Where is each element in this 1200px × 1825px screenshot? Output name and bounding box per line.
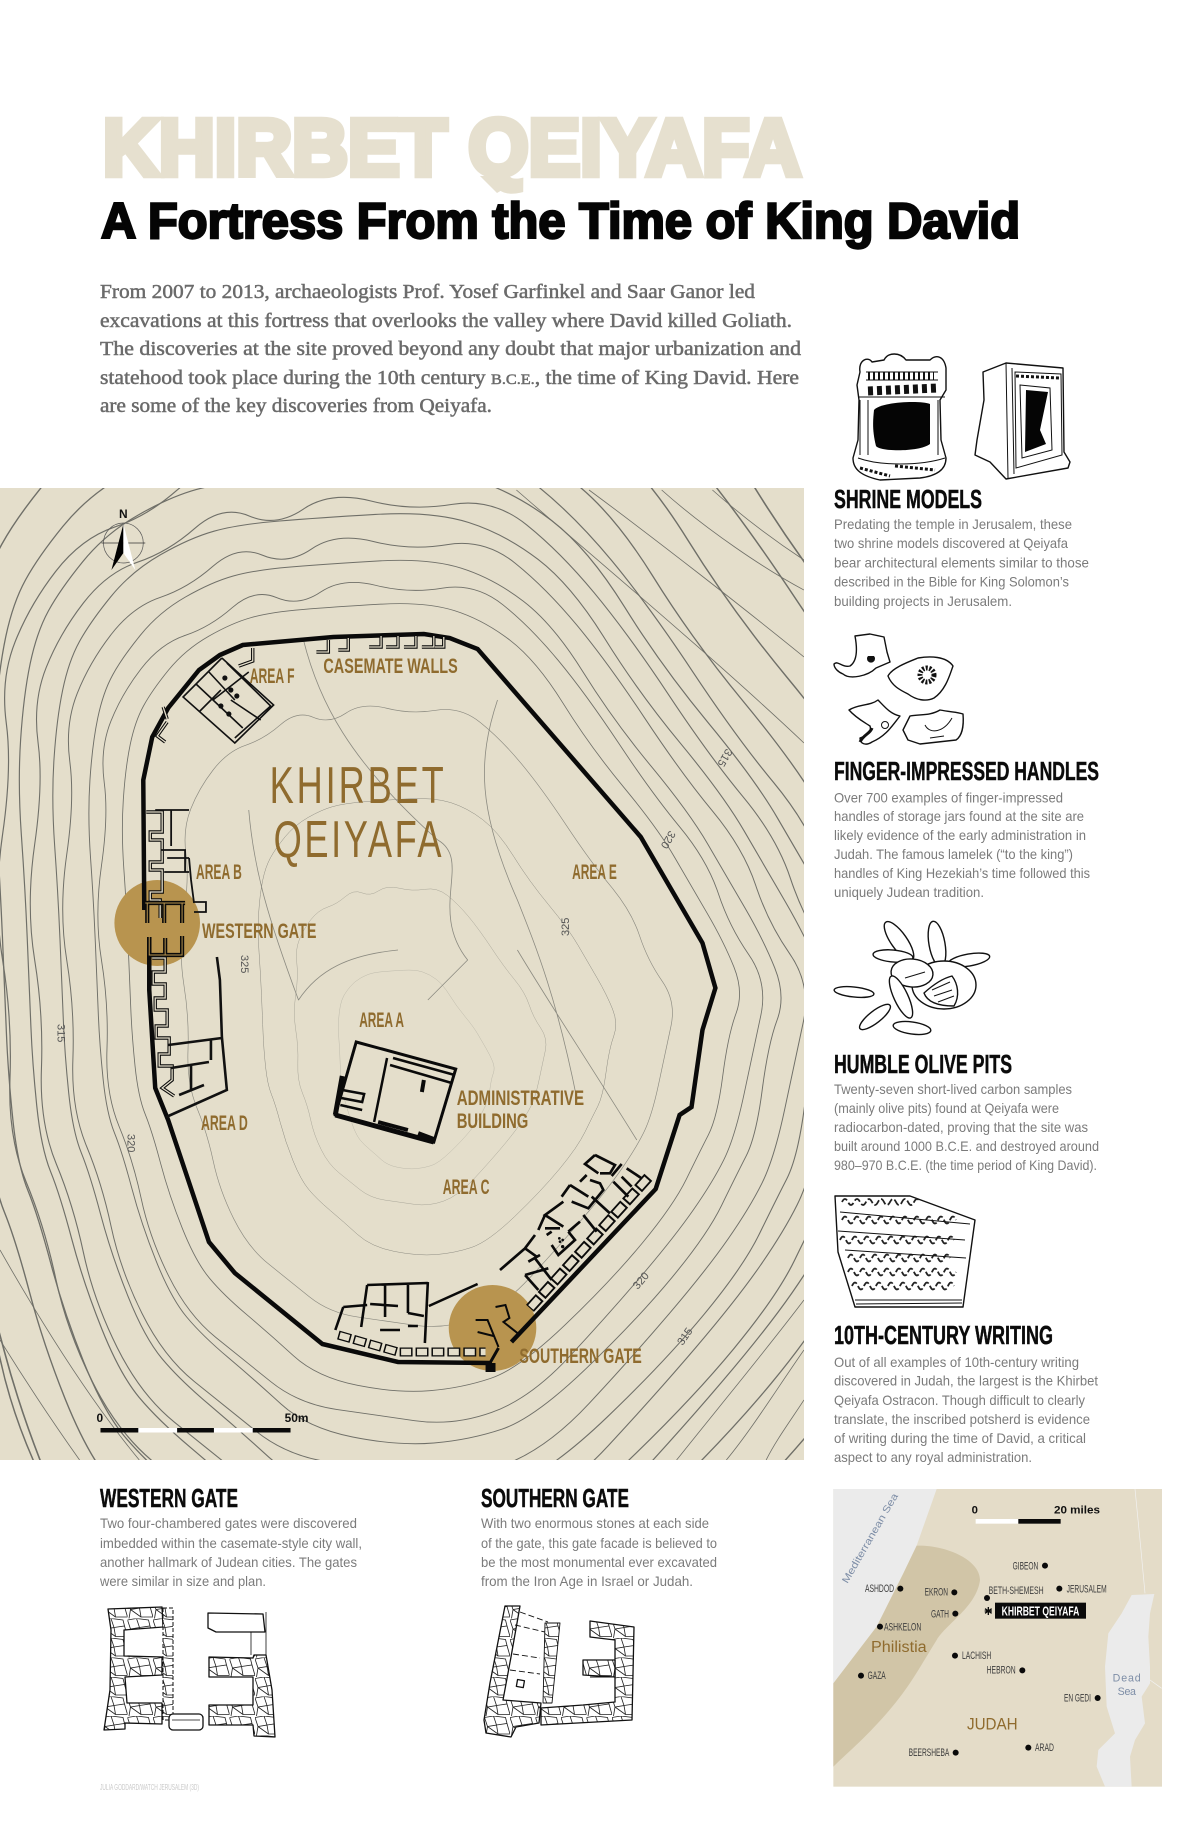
southern gate plan <box>476 1305 517 1347</box>
site name on map: QEIYAFA <box>274 811 442 869</box>
credit: JULIA GODDARD/WATCH JERUSALEM (3D) <box>100 1783 199 1792</box>
city names: ASHKELON <box>884 1622 921 1634</box>
text: finger-impressed handles: Judah. The famous lamelek (“to the king”) <box>834 846 1073 862</box>
heading: shrine models: SHRINE MODELS <box>834 484 982 514</box>
city names: GAZA <box>868 1670 886 1682</box>
city names: GATH <box>931 1608 949 1620</box>
intro text block: The discoveries at the site proved beyond any doubt that major urbanization and <box>100 338 801 360</box>
text: 10th-century writing: aspect to any royal administration. <box>834 1449 1032 1465</box>
Dead Sea label: Dead <box>1113 1672 1141 1684</box>
elevation labels: 315 <box>55 1024 67 1042</box>
map labels: AREA C <box>443 1176 490 1199</box>
elevation labels: 320 <box>124 1134 136 1152</box>
text: southern gate: With two enormous stones at each side <box>481 1515 709 1531</box>
south-east residential quarter <box>500 1155 648 1308</box>
heading: southern gate: SOUTHERN GATE <box>481 1483 629 1513</box>
text: shrine models: Predating the temple in Jerusalem, these <box>834 516 1072 532</box>
intro text block: excavations at this fortress that overlooks the valley where David killed Goliath. <box>100 310 792 332</box>
subtitle: A Fortress From the Time of King David <box>101 193 1020 249</box>
text: finger-impressed handles: Over 700 examples of finger-impressed <box>834 790 1063 806</box>
text: finger-impressed handles: handles of storage jars found at the site are <box>834 808 1084 824</box>
intro text block <box>100 281 801 417</box>
text: humble olive pits: built around 1000 B.C.E. and destroyed around <box>834 1138 1099 1154</box>
map scale bar <box>97 1411 308 1432</box>
sea <box>833 1489 937 1683</box>
text: humble olive pits <box>834 1081 1099 1173</box>
text: humble olive pits: (mainly olive pits) found at Qeiyafa were <box>834 1100 1059 1116</box>
administrative building <box>335 1042 456 1142</box>
text: 10th-century writing: Qeiyafa Ostracon. Though difficult to clearly <box>834 1392 1085 1408</box>
text: western gate: were similar in size and plan. <box>99 1573 266 1589</box>
site name on map: KHIRBET <box>270 757 444 815</box>
elevation labels <box>55 746 734 1348</box>
icon: inscribed ostracon <box>835 1196 975 1307</box>
text: western gate <box>99 1515 362 1589</box>
text: 10th-century writing: translate, the inscribed potsherd is evidence <box>834 1411 1090 1427</box>
building: area D rooms <box>166 957 227 1117</box>
scale bar: 0 <box>972 1504 978 1516</box>
text: 10th-century writing <box>834 1354 1098 1465</box>
intro text block: From 2007 to 2013, archaeologists Prof. Yosef Garfinkel and Saar Ganor led <box>100 281 755 303</box>
map scale bar: 50m <box>285 1411 308 1425</box>
map labels: SOUTHERN GATE <box>519 1345 642 1368</box>
southern rooms <box>335 1282 478 1343</box>
region: Philistia <box>833 1546 980 1767</box>
gate highlight: western <box>114 880 200 966</box>
site marker and label: KHIRBET QEIYAFA <box>1002 1605 1079 1619</box>
scale bar <box>972 1504 1100 1524</box>
Dead Sea label <box>1113 1672 1141 1698</box>
map labels: AREA D <box>201 1112 248 1135</box>
text: shrine models: described in the Bible for King Solomon’s <box>834 574 1069 590</box>
text: humble olive pits: radiocarbon-dated, proving that the site was <box>834 1119 1088 1135</box>
building: area B rooms <box>155 810 206 912</box>
intro text block: statehood took place during the 10th century B.C.E., the time of King David. Here <box>100 367 799 389</box>
region names <box>871 1639 1018 1733</box>
map labels: AREA E <box>572 861 617 884</box>
text: southern gate <box>481 1515 717 1589</box>
map labels: CASEMATE WALLS <box>323 655 458 678</box>
text: finger-impressed handles: handles of King Hezekiah’s time followed this <box>834 865 1090 881</box>
text: western gate: another hallmark of Judean cities. The gates <box>100 1554 357 1570</box>
city names: EKRON <box>925 1587 948 1599</box>
map labels: AREA A <box>359 1009 404 1032</box>
map scale bar: 0 <box>97 1411 103 1425</box>
Dead Sea <box>1097 1594 1154 1787</box>
elevation labels: 315 <box>715 746 734 768</box>
text: humble olive pits: Twenty-seven short-lived carbon samples <box>834 1081 1072 1097</box>
elevation labels: 325 <box>560 918 572 936</box>
city names <box>865 1560 1107 1759</box>
gate highlight: southern <box>449 1285 536 1371</box>
text: finger-impressed handles: uniquely Judean tradition. <box>834 884 984 900</box>
map labels: ADMINISTRATIVE <box>457 1087 584 1110</box>
heading: 10th-century writing: 10TH-CENTURY WRITING <box>834 1320 1053 1350</box>
compass: N <box>119 507 128 521</box>
text: southern gate: of the gate, this gate facade is believed to <box>481 1535 717 1551</box>
map labels <box>196 655 642 1368</box>
city names: JERUSALEM <box>1067 1583 1107 1595</box>
text: shrine models: bear architectural elements similar to those <box>834 554 1089 570</box>
icon: western gate plan <box>104 1607 275 1737</box>
icon: shrine models <box>853 354 1070 480</box>
panel: regional locator map <box>833 1489 1162 1787</box>
text: shrine models <box>834 516 1089 609</box>
icon: olive pits <box>834 918 991 1037</box>
compass <box>101 507 145 570</box>
city names: HEBRON <box>987 1665 1016 1677</box>
map labels: WESTERN GATE <box>202 920 316 943</box>
text: 10th-century writing: of writing during the time of David, a critical <box>834 1430 1086 1446</box>
text: finger-impressed handles: likely evidence of the early administration in <box>834 827 1086 843</box>
text: shrine models: two shrine models discovered at Qeiyafa <box>834 535 1068 551</box>
intro text block: are some of the key discoveries from Qeiyafa. <box>100 395 492 417</box>
text: western gate: Two four-chambered gates were discovered <box>100 1515 357 1531</box>
text: southern gate: be the most monumental ever excavated <box>481 1554 717 1570</box>
city names: LACHISH <box>962 1650 991 1662</box>
map labels: BUILDING <box>457 1110 528 1133</box>
elevation labels: 325 <box>238 955 250 973</box>
Dead Sea label: Sea <box>1118 1686 1136 1698</box>
icon: jar handles <box>834 634 963 744</box>
Mediterranean label: Mediterranean Sea <box>840 1491 901 1585</box>
text: southern gate: from the Iron Age in Israel or Judah. <box>481 1573 693 1589</box>
elevation labels: 320 <box>658 828 677 850</box>
map labels: AREA F <box>250 665 295 688</box>
elevation labels: 315 <box>675 1326 695 1348</box>
text: finger-impressed handles <box>834 790 1090 900</box>
city dots <box>858 1563 1101 1756</box>
city names: ARAD <box>1035 1742 1054 1754</box>
heading: western gate: WESTERN GATE <box>100 1483 238 1513</box>
scale bar: 20 miles <box>1054 1504 1100 1516</box>
heading: humble olive pits: HUMBLE OLIVE PITS <box>834 1049 1012 1079</box>
western gate plan <box>145 903 185 955</box>
text: 10th-century writing: Out of all examples of 10th-century writing <box>834 1354 1079 1370</box>
text: shrine models: building projects in Jerusalem. <box>834 593 1012 609</box>
casemate chambers <box>146 636 486 1352</box>
city names: GIBEON <box>1013 1560 1038 1572</box>
icon: southern gate plan <box>484 1606 634 1737</box>
city names: ASHDOD <box>865 1583 894 1595</box>
city names: BETH-SHEMESH <box>989 1585 1044 1597</box>
text: 10th-century writing: discovered in Judah, the largest is the Khirbet <box>834 1372 1098 1388</box>
region names: Philistia <box>871 1639 927 1656</box>
panel: site map <box>0 488 804 1460</box>
fortress city wall <box>143 634 715 1372</box>
title: Khirbet Qeiyafa: KHIRBET QEIYAFA <box>103 103 801 192</box>
building: area F <box>183 658 274 743</box>
text: western gate: imbedded within the casemate-style city wall, <box>100 1535 362 1551</box>
site name on map <box>270 757 444 869</box>
region names: JUDAH <box>967 1714 1018 1733</box>
elevation labels: 320 <box>631 1270 652 1292</box>
site marker and label <box>985 1603 1086 1619</box>
map labels: AREA B <box>196 861 242 884</box>
city names: EN GEDI <box>1064 1692 1091 1704</box>
text: humble olive pits: 980–970 B.C.E. (the time period of King David). <box>834 1157 1097 1173</box>
city names: BEERSHEBA <box>909 1747 950 1759</box>
